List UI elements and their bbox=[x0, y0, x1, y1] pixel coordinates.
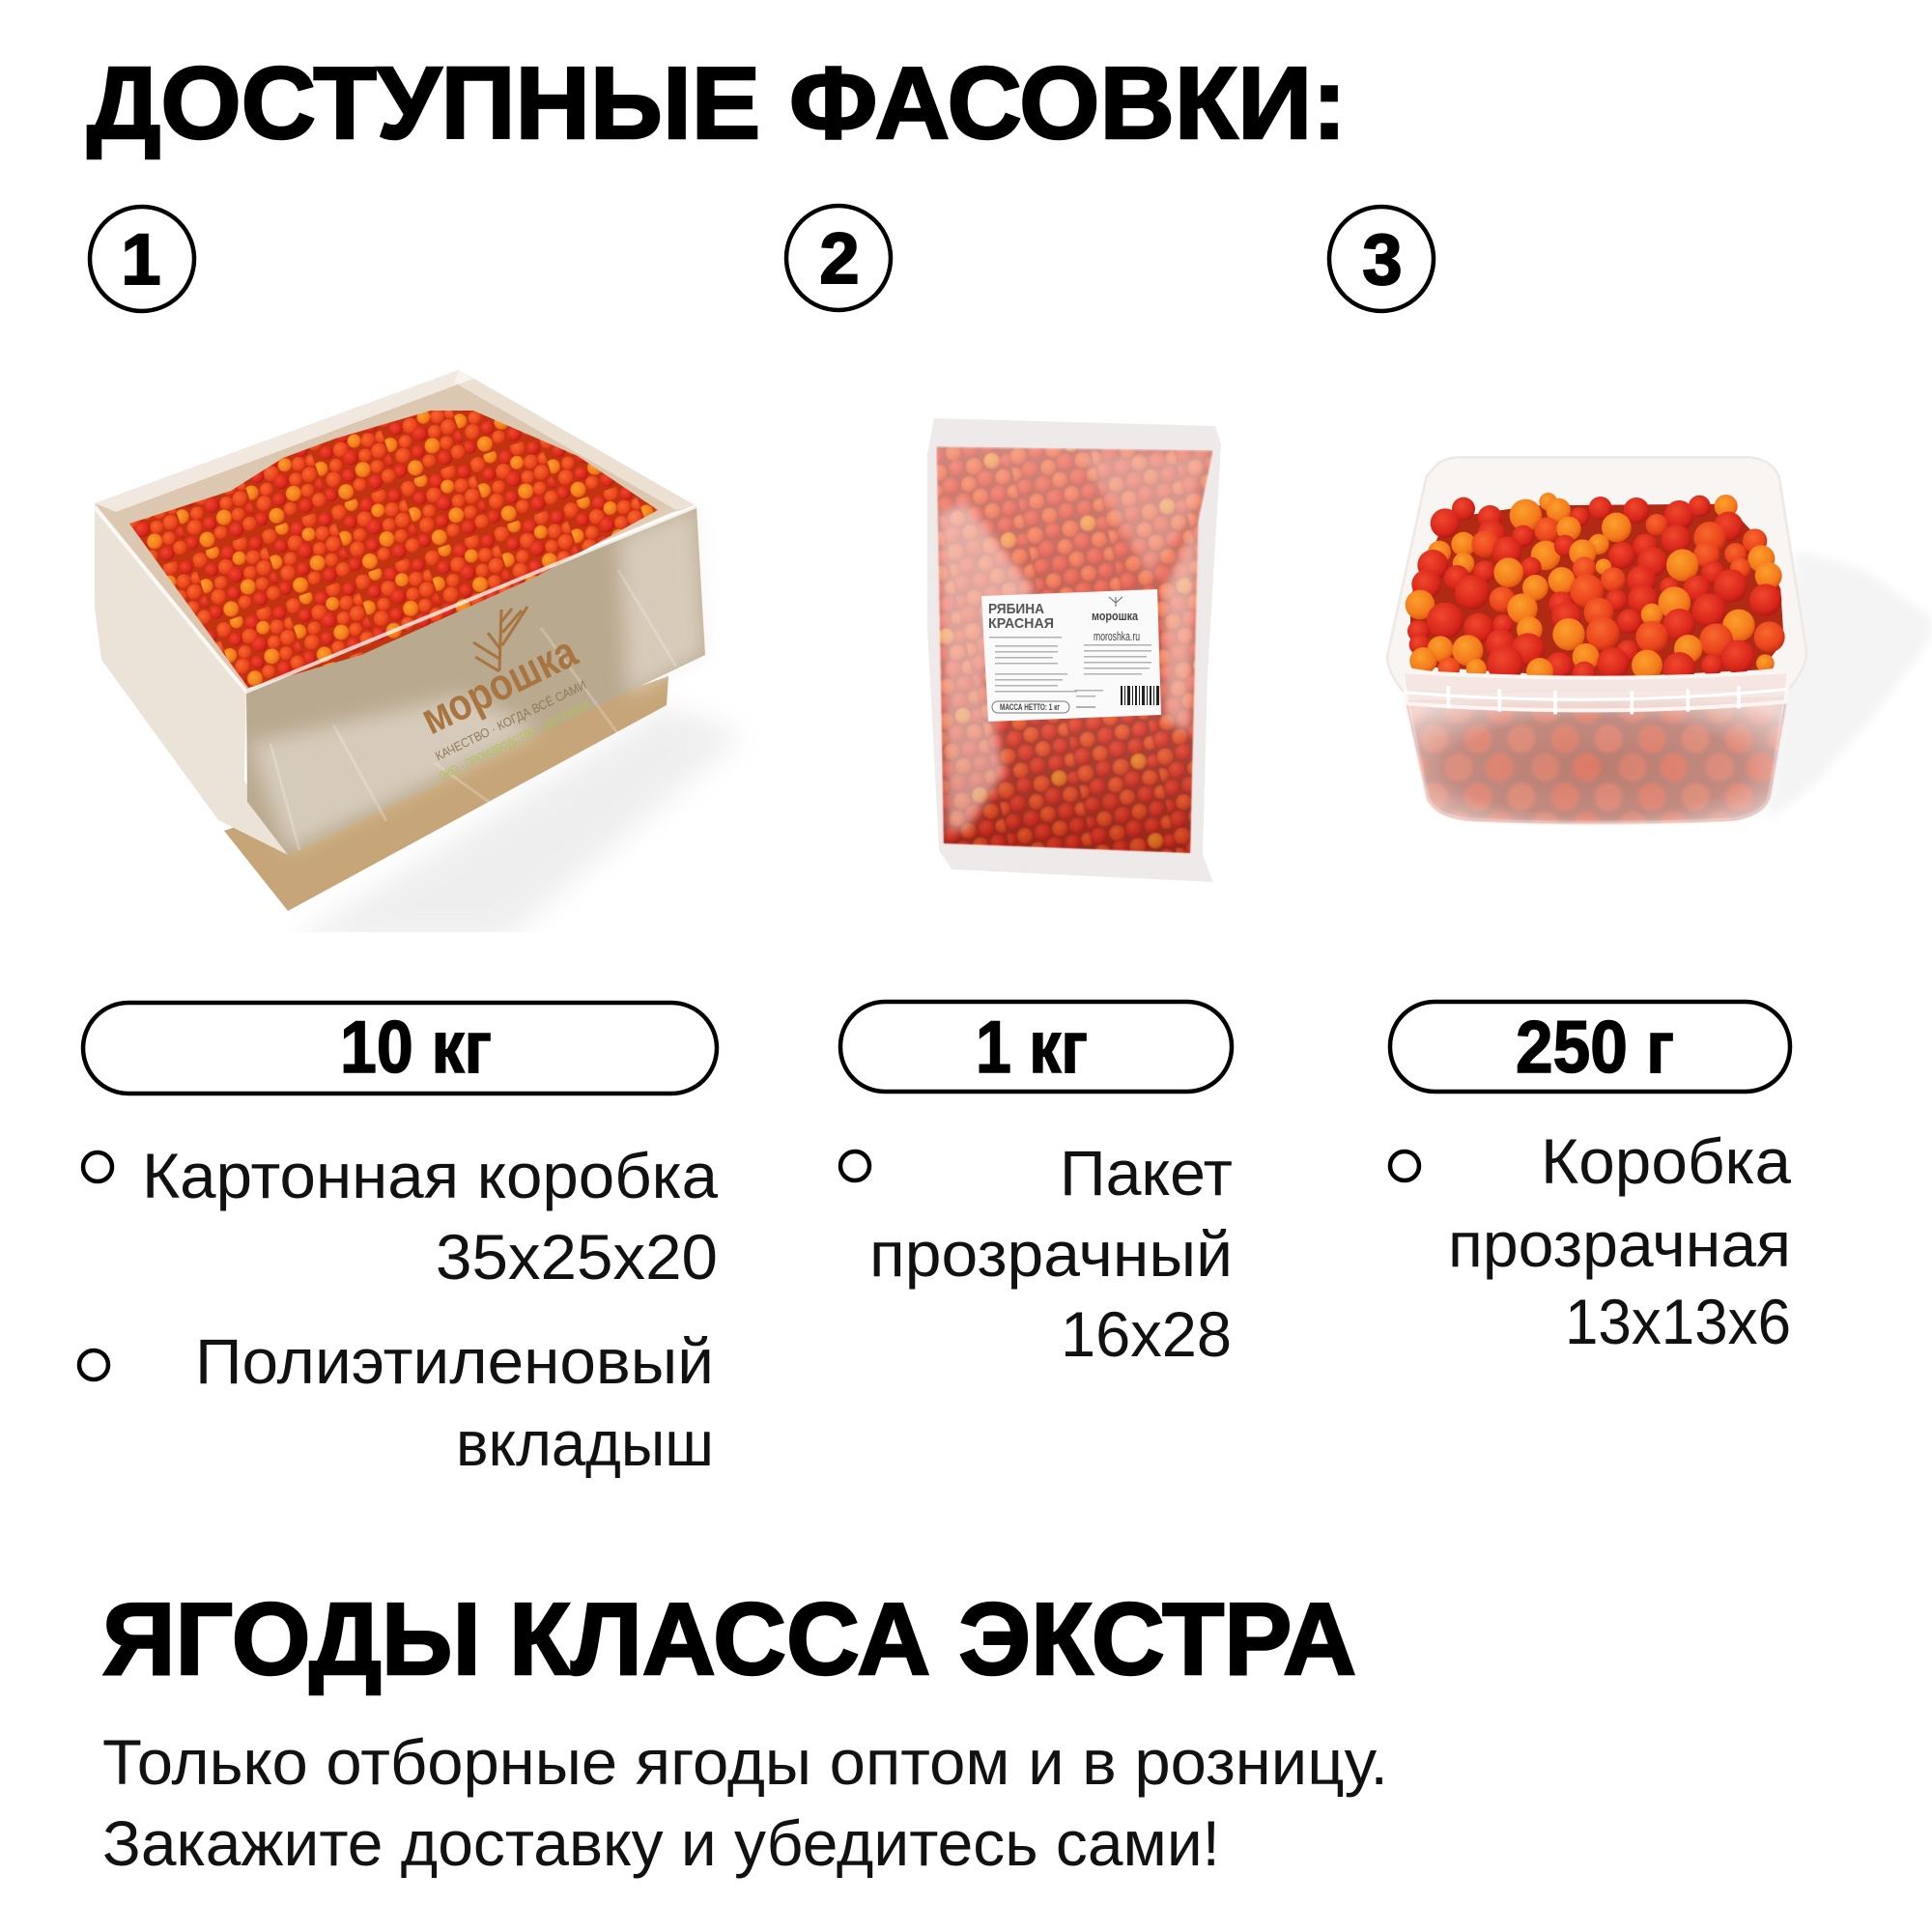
weight pill: 1 кг: 1 кг bbox=[976, 1007, 1088, 1089]
heading: extra class berries: ЯГОДЫ КЛАССА ЭКСТРА bbox=[102, 1582, 1356, 1696]
weight pill: 1 кг bbox=[840, 1002, 1232, 1092]
product label: moroshka.ru bbox=[1094, 629, 1140, 643]
list: 250 г packaging: прозрачная bbox=[1448, 1208, 1791, 1280]
number badge 3: 3 bbox=[1362, 219, 1403, 299]
photo: cardboard box with berries bbox=[95, 370, 744, 942]
product label: морошка bbox=[1092, 609, 1139, 623]
title: ДОСТУПНЫЕ ФАСОВКИ: bbox=[87, 46, 1347, 160]
weight pill: 10 кг bbox=[83, 1003, 717, 1094]
number badge 1: 1 bbox=[121, 219, 161, 299]
logo on box bbox=[405, 626, 602, 782]
list: 1 кг packaging bbox=[840, 1137, 1233, 1370]
product label: РЯБИНА bbox=[988, 601, 1044, 617]
list: 10 кг packaging: Полиэтиленовый bbox=[195, 1325, 714, 1397]
list: 250 г packaging: 13х13х6 bbox=[1565, 1286, 1791, 1357]
logo on box: морошка bbox=[413, 626, 584, 744]
list: 10 кг packaging bbox=[79, 1140, 718, 1479]
weight pill: 250 г bbox=[1390, 1002, 1790, 1092]
number badge 1 bbox=[90, 207, 194, 311]
list: 10 кг packaging: вкладыш bbox=[456, 1407, 714, 1479]
icon: tree logo bbox=[473, 607, 527, 671]
list: 1 кг packaging: прозрачный bbox=[869, 1218, 1233, 1290]
list: 250 г packaging bbox=[1390, 1125, 1791, 1357]
product label: КРАСНАЯ bbox=[988, 615, 1054, 632]
list: 250 г packaging: Коробка bbox=[1541, 1125, 1791, 1197]
list: 10 кг packaging: 35х25х20 bbox=[436, 1221, 718, 1293]
logo on box: КАЧЕСТВО · КОГДА ВСЁ САМИ bbox=[433, 677, 588, 763]
number badge 2 bbox=[786, 206, 891, 310]
product label: МАССА НЕТТО: 1 кг bbox=[1000, 702, 1060, 713]
photo: plastic bag with berries bbox=[927, 418, 1221, 882]
list: 1 кг packaging: Пакет bbox=[1060, 1137, 1233, 1208]
tub berries bbox=[1406, 493, 1785, 685]
weight pill: 250 г: 250 г bbox=[1516, 1007, 1674, 1089]
list: 10 кг packaging: Картонная коробка bbox=[142, 1140, 718, 1211]
list: 1 кг packaging: 16х28 bbox=[1061, 1298, 1232, 1370]
photo: plastic tub with berries bbox=[1387, 457, 1932, 823]
number badge 3 bbox=[1329, 207, 1434, 311]
tub rim bbox=[1403, 671, 1789, 714]
closing text: Закажите доставку и убедитесь сами! bbox=[102, 1807, 1220, 1879]
product label bbox=[981, 589, 1161, 722]
number badge 2: 2 bbox=[819, 218, 860, 298]
logo on box: ЭКО · ПРОИЗВОДСТВО · ДОСТАВКА bbox=[438, 697, 593, 782]
closing text: Только отборные ягоды оптом и в розницу. bbox=[102, 1726, 1388, 1798]
closing text bbox=[102, 1726, 1388, 1879]
weight pill: 10 кг: 10 кг bbox=[340, 1007, 492, 1089]
